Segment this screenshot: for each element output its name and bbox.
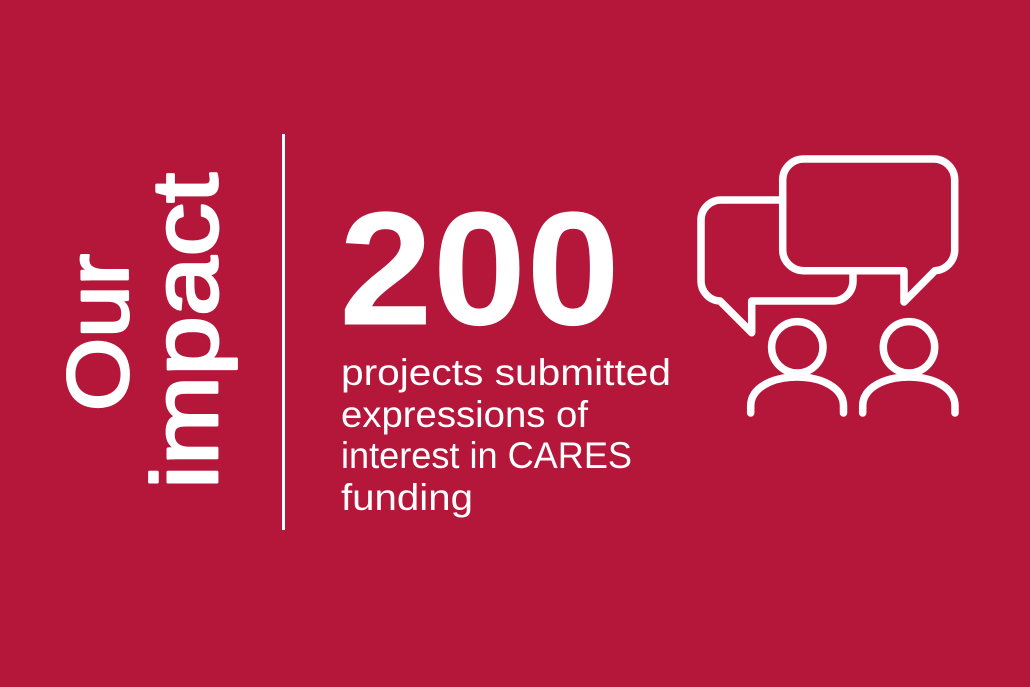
description text [341, 352, 671, 518]
description text: expressions of [341, 394, 589, 435]
icon: right person [863, 322, 955, 413]
heading: Our impact (rotated): Our [50, 254, 146, 411]
description text: interest in CARES [341, 435, 632, 476]
description text: funding [341, 477, 473, 518]
icon: two people with speech bubbles [701, 159, 955, 413]
icon: front speech bubble [783, 159, 955, 302]
icon: back speech bubble [701, 200, 853, 333]
big number: 200: 200 [339, 178, 620, 360]
heading: Our impact (rotated) [50, 173, 237, 489]
description text: projects submitted [341, 352, 671, 393]
icon: left person [751, 322, 844, 413]
heading: Our impact (rotated): impact [133, 173, 237, 489]
